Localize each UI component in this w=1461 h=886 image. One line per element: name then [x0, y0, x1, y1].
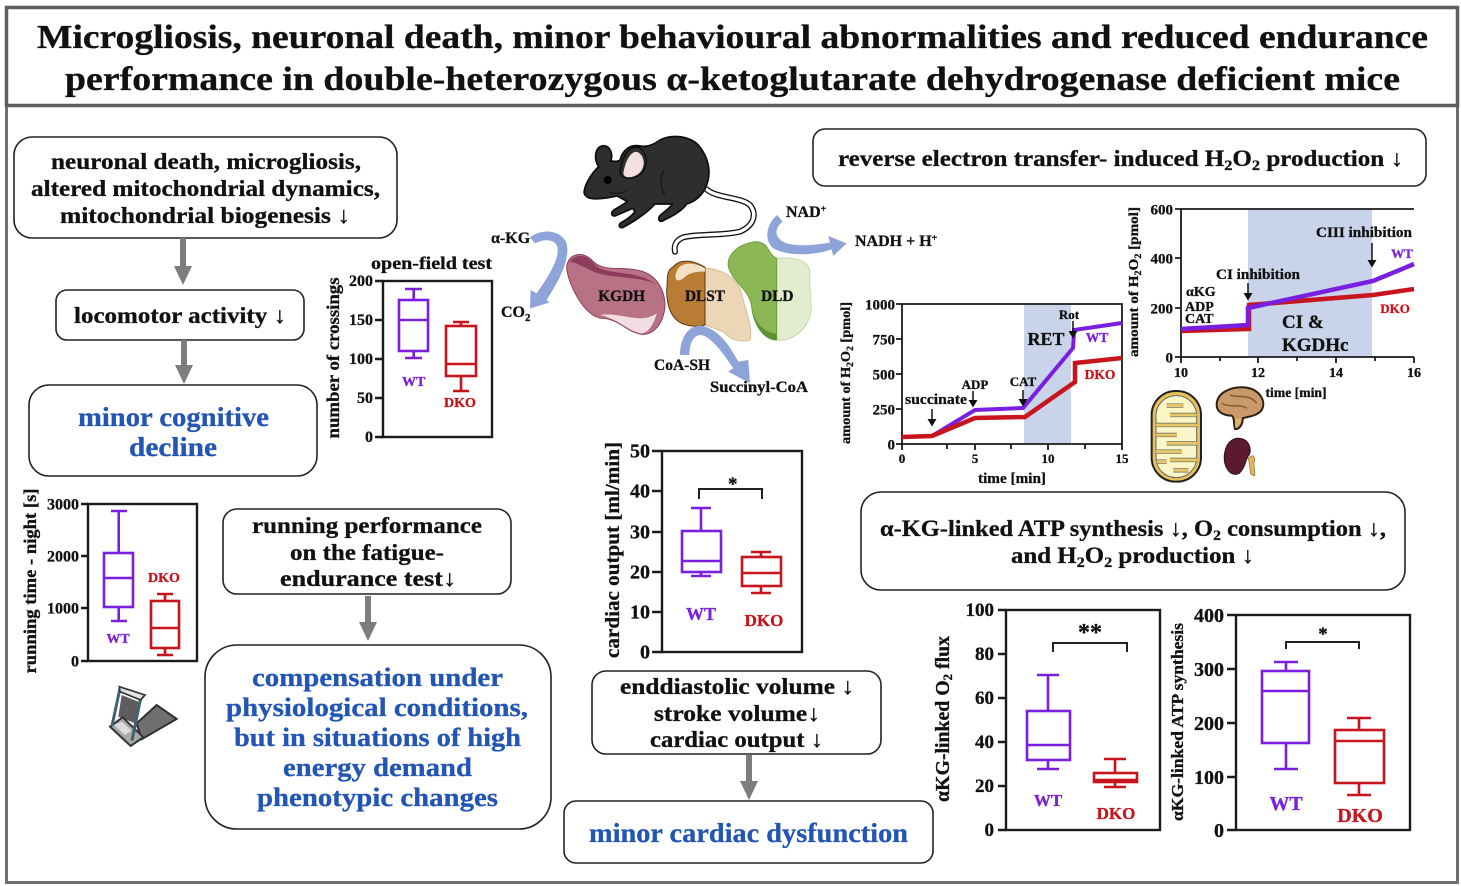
chart: CI and KGDHc H2O2 trace: DKO — [1380, 301, 1410, 316]
box plot: WT: WT — [402, 375, 426, 390]
chart: ATP synthesis: αKG-linked ATP synthesis — [1168, 623, 1187, 821]
callout: alpha-KG-linked ATP synthesis: consumption ↓, — [1221, 516, 1386, 541]
box plot: DKO: DKO — [1097, 804, 1135, 823]
label: CO2: CO — [501, 304, 525, 321]
chart: CI and KGDHc H2O2 trace: 10 — [1174, 366, 1188, 381]
box plot: WT — [682, 508, 721, 624]
box plot: WT: WT — [1269, 793, 1303, 815]
callout: running performance: running performance — [252, 513, 482, 538]
callout: locomotor activity: locomotor activity ↓ — [74, 303, 286, 328]
chart: RET H2O2 trace: DKO — [1085, 367, 1115, 382]
trace: WT — [1181, 264, 1414, 329]
chart: CI and KGDHc H2O2 trace: [pmol] — [1126, 207, 1141, 254]
chart: open-field test: open-field test — [371, 253, 492, 273]
callout: cardiac volumes: enddiastolic volume ↓ — [620, 674, 854, 699]
title: performance in double-heterozygous α-ketoglutarate dehydrogenase deficient mice — [65, 61, 1400, 98]
label: CO2: 2 — [525, 312, 531, 324]
chart: CI and KGDHc H2O2 trace: 600 — [1150, 202, 1173, 218]
box plot: DKO — [1335, 718, 1384, 827]
chart: O2 flux: 40 — [975, 732, 994, 753]
box plot: WT: WT — [1034, 791, 1063, 810]
chart: open-field test: 200 — [349, 273, 373, 290]
trace: WT — [902, 323, 1122, 437]
callout: reverse electron transfer: 2 — [1252, 158, 1260, 174]
chart: ATP synthesis: 200 — [1194, 713, 1224, 735]
significance bracket — [1053, 620, 1127, 652]
box plot: DKO: DKO — [745, 611, 783, 630]
label: NADH: + — [932, 233, 938, 244]
trace: DKO — [902, 358, 1122, 437]
icon: mitochondrion — [1152, 391, 1201, 482]
callout: running performance — [223, 509, 511, 594]
chart: CI and KGDHc H2O2 trace: 16 — [1407, 366, 1421, 381]
box plot: DKO: DKO — [148, 571, 180, 586]
chart: O2 flux: 100 — [966, 600, 994, 621]
callout: alpha-KG-linked ATP synthesis: 2 — [1213, 528, 1221, 544]
callout: running performance: endurance test↓ — [280, 566, 456, 591]
callout: cardiac volumes: stroke volume↓ — [654, 701, 820, 726]
chart: RET H2O2 trace: CAT — [1010, 374, 1037, 389]
mouse tail — [675, 189, 754, 252]
chart: O2 flux: 80 — [975, 644, 994, 665]
chart: RET H2O2 trace: 0 — [899, 451, 905, 466]
box plot: DKO — [444, 322, 476, 411]
callout: neuronal death: neuronal death, microgliosis, — [51, 149, 361, 174]
callout: alpha-KG-linked ATP synthesis — [861, 492, 1405, 590]
title — [6, 8, 1458, 106]
callout: locomotor activity — [56, 290, 304, 340]
chart: CI and KGDHc H2O2 trace: CIII inhibition — [1316, 225, 1413, 241]
chart: cardiac output: 40 — [630, 480, 650, 502]
chart: RET H2O2 trace: 15 — [1116, 451, 1129, 466]
label: CoA-SH: CoA-SH — [654, 357, 711, 374]
arrow: CoA-SH to Succinyl-CoA — [680, 326, 750, 383]
significance bracket — [1286, 624, 1359, 649]
callout: minor cognitive decline: minor cognitive — [78, 402, 269, 432]
chart: cardiac output: 30 — [630, 522, 650, 544]
enzyme: KGDH — [567, 255, 665, 334]
chart: CI and KGDHc H2O2 trace: 200 — [1150, 302, 1173, 318]
arrow: to cognitive decline — [175, 340, 193, 384]
RET band — [1024, 304, 1071, 443]
chart: cardiac output: 0 — [640, 642, 650, 664]
label: NADH: NADH + H — [855, 233, 932, 250]
chart: CI and KGDHc H2O2 trace: WT — [1391, 246, 1413, 261]
chart: RET H2O2 trace: RET — [1027, 329, 1065, 349]
chart: open-field test — [323, 253, 492, 446]
chart: O2 flux: αKG-linked O — [932, 679, 954, 802]
callout: minor cardiac dysfunction — [564, 801, 933, 863]
chart: ATP synthesis: 300 — [1194, 659, 1224, 681]
enzyme: DLD — [728, 242, 811, 340]
chart: RET H2O2 trace: ADP — [962, 377, 988, 392]
callout: neuronal death — [14, 137, 397, 238]
arrow: to cardiac dysfunction — [740, 755, 758, 800]
chart: CI and KGDHc H2O2 trace: amount of H — [1126, 284, 1141, 357]
label: NAD+: NAD — [786, 204, 821, 221]
chart: open-field test: number of crossings — [323, 277, 343, 439]
callout: running performance: on the fatigue- — [290, 540, 444, 565]
chart: RET H2O2 trace: O — [838, 351, 853, 362]
chart: cardiac output: 20 — [630, 562, 650, 584]
chart: open-field test: 50 — [357, 390, 373, 407]
chart: O2 flux — [932, 600, 1160, 841]
callout: minor cardiac dysfunction: minor cardiac dysfunction — [589, 818, 908, 848]
arrow: to compensation — [359, 596, 377, 641]
chart: RET H2O2 trace: [pmol] — [838, 302, 853, 346]
callout: cardiac volumes — [592, 671, 881, 754]
label: alpha-KG: α-KG — [491, 230, 531, 247]
callout: alpha-KG-linked ATP synthesis: production ↓ — [1112, 543, 1254, 568]
callout: alpha-KG-linked ATP synthesis: and H — [1011, 543, 1072, 568]
chart: CI and KGDHc H2O2 trace: KGDHc — [1282, 335, 1348, 356]
chart: RET H2O2 trace: 0 — [888, 438, 895, 454]
mouse body — [584, 136, 709, 228]
callout: reverse electron transfer: reverse electron transfer- induced H — [838, 146, 1193, 171]
callout: reverse electron transfer — [813, 129, 1426, 186]
box plot: DKO — [148, 571, 180, 655]
box plot: DKO — [1094, 759, 1137, 823]
callout: compensation — [205, 645, 551, 829]
chart: open-field test: 100 — [349, 351, 373, 368]
chart: O2 flux: flux — [932, 636, 954, 674]
title: Microgliosis, neuronal death, minor behavioural abnormalities and reduced endurance — [37, 19, 1428, 56]
illustration: mouse — [584, 136, 754, 252]
chart: RET H2O2 trace: amount of H — [838, 371, 853, 444]
chart: open-field test: 150 — [349, 312, 373, 329]
label: Succinyl-CoA: Succinyl-CoA — [710, 379, 808, 396]
callout: compensation: energy demand — [283, 753, 473, 782]
chart: CI and KGDHc H2O2 trace: CI inhibition — [1216, 267, 1301, 283]
box plot: WT — [104, 511, 133, 647]
chart: RET H2O2 trace: 10 — [1042, 451, 1054, 466]
chart: RET H2O2 trace: 2 — [845, 346, 855, 351]
callout: neuronal death: mitochondrial biogenesis ↓ — [60, 203, 350, 228]
chart: ATP synthesis: 0 — [1214, 820, 1224, 842]
callout: compensation: phenotypic changes — [257, 783, 498, 812]
chart: running time: 1000 — [47, 600, 79, 618]
icon: treadmill — [110, 687, 177, 746]
chart: RET H2O2 trace: 5 — [972, 451, 979, 466]
significance bracket: ** — [1078, 620, 1102, 646]
callout: alpha-KG-linked ATP synthesis: α-KG-linked ATP synthesis ↓, O — [880, 516, 1193, 541]
trace: DKO — [1181, 289, 1414, 331]
significance bracket: * — [1318, 624, 1328, 645]
chart: RET H2O2 trace: 1000 — [865, 298, 895, 314]
box plot: WT — [399, 289, 428, 390]
callout: minor cognitive decline — [29, 385, 317, 476]
mouse ear — [620, 147, 646, 178]
chart: RET H2O2 trace: succinate — [905, 392, 967, 408]
chart: ATP synthesis: 400 — [1194, 605, 1224, 627]
chart: running time: 2000 — [47, 548, 79, 566]
icon: kidney — [1224, 438, 1255, 476]
chart: CI and KGDHc H2O2 trace: time [min] — [1266, 385, 1326, 400]
arrow: to locomotor activity — [174, 238, 192, 285]
chart: RET H2O2 trace: 500 — [872, 368, 895, 384]
chart: running time: 0 — [71, 654, 79, 670]
chart: ATP synthesis: 100 — [1194, 767, 1224, 789]
callout: alpha-KG-linked ATP synthesis: O — [1085, 543, 1104, 568]
enzyme: KGDH: KGDH — [598, 288, 645, 305]
box plot: DKO — [742, 552, 783, 630]
chart: RET H2O2 trace: 2 — [845, 362, 855, 367]
chart: CI and KGDHc H2O2 trace: 2 — [1133, 253, 1143, 259]
diagram: KGDH complex — [530, 215, 847, 383]
chart: CI and KGDHc H2O2 trace: 400 — [1150, 252, 1173, 268]
callout: reverse electron transfer: 2 — [1224, 158, 1232, 174]
chart: running time: 3000 — [47, 496, 79, 514]
label: NAD+: + — [821, 204, 827, 215]
chart: open-field test: 0 — [365, 429, 373, 446]
chart: O2 flux: 2 — [940, 674, 955, 680]
chart: RET H2O2 trace: 250 — [872, 402, 895, 418]
box plot: WT — [1027, 675, 1070, 810]
chart: cardiac output: cardiac output [ml/min] — [602, 442, 624, 658]
chart: RET H2O2 trace: time [min] — [978, 471, 1046, 487]
chart: ATP synthesis — [1168, 605, 1410, 842]
chart: RET H2O2 trace: 750 — [872, 332, 895, 348]
chart: O2 flux: 60 — [975, 688, 994, 709]
callout: compensation: physiological conditions, — [226, 693, 528, 722]
icon: brain — [1217, 387, 1263, 429]
callout: minor cognitive decline: decline — [129, 432, 217, 462]
chart: RET H2O2 trace — [838, 298, 1129, 487]
chart: cardiac output — [602, 440, 802, 664]
box plot: WT — [1262, 662, 1309, 815]
arrow: alpha-KG to CO2 — [530, 231, 567, 308]
chart: CI and KGDHc H2O2 trace — [1126, 202, 1421, 400]
chart: O2 flux: 0 — [984, 820, 994, 841]
box plot: DKO: DKO — [1337, 805, 1383, 827]
callout: compensation: compensation under — [252, 663, 503, 692]
chart: CI and KGDHc H2O2 trace: O — [1126, 259, 1141, 270]
chart: CI and KGDHc H2O2 trace: CAT — [1185, 312, 1214, 327]
CI & KGDHc band — [1248, 209, 1372, 357]
callout: cardiac volumes: cardiac output ↓ — [650, 727, 823, 752]
box plot: DKO: DKO — [444, 396, 476, 411]
callout: reverse electron transfer: O — [1232, 146, 1252, 171]
chart: cardiac output: 50 — [630, 440, 650, 462]
box plot: WT: WT — [686, 604, 716, 624]
enzyme: DLST — [667, 261, 751, 341]
callout: compensation: but in situations of high — [234, 723, 522, 752]
callout: neuronal death: altered mitochondrial dynamics, — [31, 176, 380, 201]
chart: CI and KGDHc H2O2 trace: 12 — [1251, 366, 1265, 381]
chart: CI and KGDHc H2O2 trace: 2 — [1133, 270, 1143, 275]
significance bracket — [699, 474, 762, 499]
significance bracket: * — [728, 474, 737, 495]
chart: CI and KGDHc H2O2 trace: αKG — [1186, 285, 1216, 300]
box plot: WT: WT — [106, 632, 130, 647]
chart: O2 flux: 20 — [975, 776, 994, 797]
chart: CI and KGDHc H2O2 trace: ADP — [1185, 300, 1214, 315]
chart: CI and KGDHc H2O2 trace: 0 — [1166, 350, 1173, 366]
callout: alpha-KG-linked ATP synthesis: 2 — [1077, 555, 1085, 571]
enzyme: DLD: DLD — [761, 288, 793, 305]
callout: alpha-KG-linked ATP synthesis: 2 — [1104, 555, 1112, 571]
enzyme: DLST: DLST — [685, 288, 725, 305]
chart: CI and KGDHc H2O2 trace: CI & — [1282, 312, 1324, 333]
chart: cardiac output: 10 — [630, 602, 650, 624]
chart: running time: running time - night [s] — [20, 488, 40, 674]
chart: running time — [20, 488, 197, 674]
chart: CI and KGDHc H2O2 trace: 14 — [1329, 366, 1343, 381]
chart: RET H2O2 trace: WT — [1086, 330, 1108, 345]
callout: reverse electron transfer: production ↓ — [1260, 146, 1403, 171]
chart: RET H2O2 trace: Rot — [1059, 307, 1080, 322]
arrow: NAD+ to NADH — [767, 215, 847, 256]
